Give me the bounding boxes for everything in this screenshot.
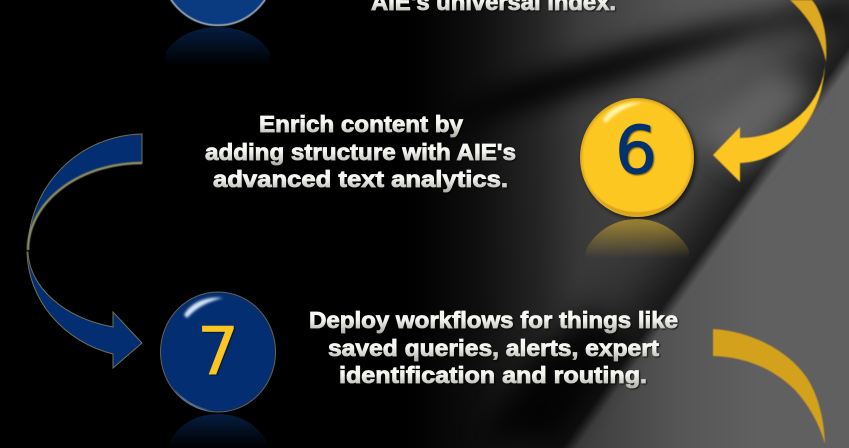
- step 6 text: adding structure with AIE's: [205, 139, 516, 165]
- step 7 button: [160, 292, 276, 448]
- step 6 button: [580, 98, 694, 258]
- step 7 text: identification and routing.: [339, 362, 647, 388]
- step 6 text: advanced text analytics.: [213, 166, 508, 192]
- step 7 text: Deploy workflows for things like: [309, 307, 678, 333]
- reflection of button 6: [586, 219, 689, 258]
- step 6 text: [205, 111, 516, 192]
- reflection of button 7: [167, 414, 269, 448]
- arrow: yellow arc at lower right: [713, 329, 825, 444]
- step 5 button (cropped): [161, 0, 275, 66]
- step 6 text: Enrich content by: [259, 111, 463, 137]
- number 7: 7: [197, 313, 239, 390]
- step 7 text: [309, 307, 678, 388]
- number 6: 6: [615, 112, 657, 189]
- arrow: yellow arrow into step 6: [713, 0, 826, 182]
- step 7 text: saved queries, alerts, expert: [328, 335, 659, 361]
- arrow: blue arrow into step 7: [27, 134, 142, 368]
